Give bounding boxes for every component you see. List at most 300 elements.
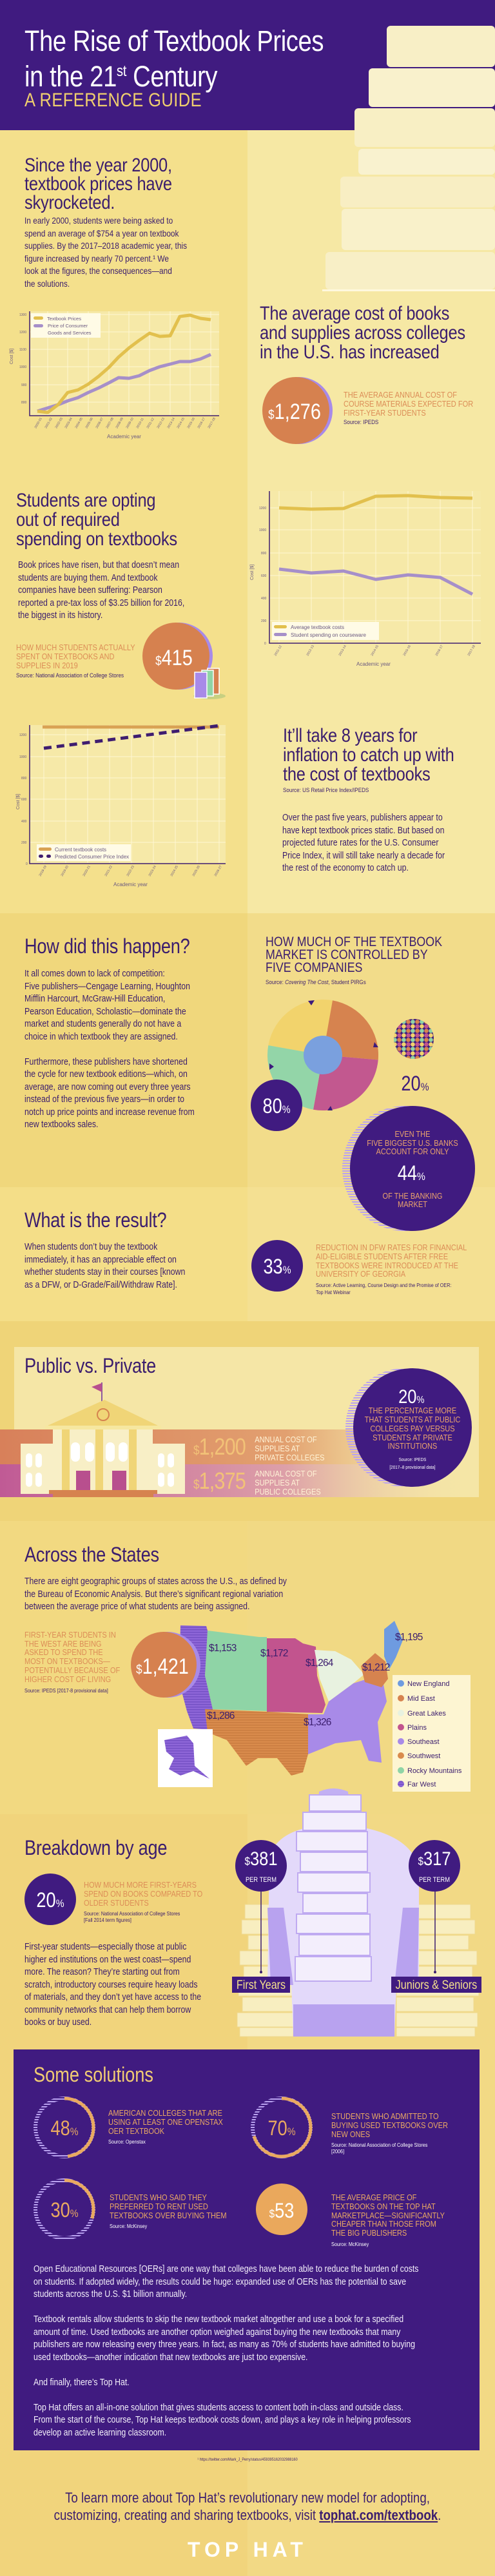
- callout: 70% used: [2006]: [331, 2148, 344, 2155]
- text: first-year students: higher ed institutions on the west coast—spend: [24, 1954, 191, 1964]
- callout: $415 label: SPENT ON TEXTBOOKS AND: [16, 652, 114, 661]
- text: book prices: the biggest in its history.: [18, 610, 102, 621]
- chart: textbook prices vs consumer goods: 2011-12: [146, 417, 155, 429]
- callout: $53 top hat: THE BIG PUBLISHERS: [331, 2228, 407, 2238]
- chart: textbook costs vs student spending: Student spending on courseware: [291, 632, 367, 638]
- stat circle: 20% public vs private: THAT STUDENTS AT PUBLIC: [365, 1415, 461, 1424]
- callout: 30% rent: TEXTBOOKS OVER BUYING THEM: [110, 2211, 227, 2220]
- text: first-year students: scratch, introductory courses require heavy loads: [24, 1980, 198, 1990]
- text: first-year students: books or buy used.: [24, 2017, 92, 2028]
- stat circle: banks 44%: FIVE BIGGEST U.S. BANKS: [367, 1138, 458, 1148]
- callout: $53 top hat: THE AVERAGE PRICE OF: [331, 2193, 416, 2202]
- chart: textbook prices vs consumer goods: 2005-06: [85, 417, 94, 429]
- stat: $1,200 private: SUPPLIES AT: [255, 1444, 300, 1453]
- heading: market controlled: FIVE COMPANIES: [266, 960, 362, 975]
- chart: textbook costs vs student spending: 200: [261, 619, 267, 623]
- donut: 30%: [35, 2180, 93, 2238]
- chart: textbook costs vs predicted CPI: 2021-22: [104, 865, 113, 877]
- text: intro: supplies. By the 2017–2018 academic year, this: [24, 240, 187, 251]
- legend: map regions: Plains: [407, 1724, 427, 1732]
- callout: 20% first-years: [Fall 2014 term figures]: [84, 1917, 131, 1923]
- chart: textbook costs vs predicted CPI: 2025-26: [192, 865, 201, 877]
- text: DFW: as a DFW, or D-Grade/Fail/Withdraw Rate].: [24, 1280, 177, 1290]
- callout: 30% rent: [110, 2193, 227, 2229]
- stat: first years $381: $381: [244, 1848, 278, 1869]
- text: publishers static: the rest of the economy to catch up.: [282, 863, 409, 873]
- text: lack of competition: Mifflin Harcourt, McGraw-Hill Education,: [24, 994, 165, 1004]
- stat: $1,375 public: SUPPLIES AT: [255, 1478, 300, 1487]
- chart: textbook prices vs consumer goods: 2017-18: [208, 417, 217, 429]
- chart: textbook costs vs predicted CPI: Cost [$]: [16, 794, 21, 809]
- callout: 48% OER: OER TEXTBOOK: [108, 2126, 164, 2136]
- title: The Rise of Textbook Prices: [24, 24, 324, 57]
- chart: textbook prices vs consumer goods: Price of Consumer: [48, 323, 88, 329]
- text: solutions paragraphs: develop an active learning classroom.: [34, 2427, 166, 2437]
- chart: textbook costs vs student spending: 2015-16: [403, 644, 412, 657]
- callout: 70% used: Source: National Association of College Stores: [331, 2142, 427, 2148]
- source: covering the cost: Source: Covering The Cost, Student PIRGs: [266, 979, 366, 986]
- callout: 48% OER: Source: Openstax: [108, 2138, 146, 2145]
- callout: $415 label: Source: National Association of College Stores: [16, 672, 124, 679]
- heading: public vs private: Public vs. Private: [24, 1354, 156, 1377]
- text: book prices: reported a pre-tax loss of $3.25 billion for 2016,: [18, 598, 184, 608]
- chart: textbook costs vs student spending: 1000: [259, 528, 266, 532]
- text: book prices: Book prices have risen, but that doesn’t mean: [18, 560, 179, 570]
- chart: textbook prices vs consumer goods: 2007-08: [106, 417, 115, 429]
- callout: $1,276 label: [344, 390, 473, 426]
- stat: $1,200 private: [193, 1433, 324, 1462]
- text: lack of competition: the cycle for new textbook editions—which, on: [24, 1069, 188, 1080]
- chart: textbook costs vs predicted CPI: 2019-20: [61, 865, 70, 877]
- text: solutions paragraphs: Textbook rentals allow students to skip the new textbook market altogether and use a book for a specified: [34, 2314, 403, 2325]
- chart: textbook costs vs predicted CPI: 400: [21, 820, 27, 824]
- title: in the 21st Century: [24, 60, 217, 93]
- chart: textbook costs vs predicted CPI: 1000: [19, 755, 26, 759]
- callout: 20% first-years: HOW MUCH MORE FIRST-YEARS: [84, 1880, 197, 1890]
- text: lack of competition: average, are now coming out every three years: [24, 1081, 191, 1092]
- chart: textbook prices vs consumer goods: 2012-13: [157, 417, 166, 429]
- chart: textbook costs vs predicted CPI: 2024-25: [170, 865, 179, 877]
- legend: map regions: Far West: [407, 1781, 436, 1788]
- heading: breakdown by age: Breakdown by age: [24, 1836, 167, 1859]
- stat circle: 20% breakdown by age: 20%: [36, 1889, 64, 1912]
- map: US regions: $1,286: [207, 1710, 235, 1721]
- heading: market controlled: HOW MUCH OF THE TEXTBOOK: [266, 935, 442, 949]
- chart: textbook costs vs predicted CPI: 2023-24: [148, 865, 157, 877]
- map: US regions: $1,153: [209, 1643, 237, 1654]
- callout: 70% used: BUYING USED TEXTBOOKS OVER: [331, 2120, 448, 2130]
- call to action: To learn more about Top Hat’s revolutionary new model for adopting,: [65, 2490, 430, 2506]
- donut: 30%: 30%: [50, 2199, 79, 2222]
- chart: textbook costs vs student spending: 600: [261, 574, 267, 578]
- stat circle: banks 44%: ACCOUNT FOR ONLY: [376, 1147, 449, 1156]
- callout: 33% label: REDUCTION IN DFW RATES FOR FINANCIAL: [316, 1243, 467, 1252]
- stat circle: 20% breakdown by age: [24, 1874, 76, 1925]
- chart: textbook prices vs consumer goods: [10, 311, 219, 440]
- chart: textbook costs vs student spending: 2014-15: [371, 644, 380, 657]
- cost bars: [0, 1429, 477, 1497]
- legend: map regions: Mid East: [407, 1695, 435, 1703]
- stat circle: $53: $53: [269, 2200, 294, 2223]
- chart: textbook costs vs predicted CPI: Academic year: [113, 882, 148, 887]
- text: publishers static: [282, 813, 445, 873]
- callout: 70% used: STUDENTS WHO ADMITTED TO: [331, 2111, 439, 2121]
- callout: 20% first-years: SPEND ON BOOKS COMPARED TO: [84, 1889, 202, 1899]
- stat circle: 33%: 33%: [263, 1255, 291, 1279]
- stat: $1,375 public: $1,375: [193, 1467, 246, 1494]
- text: lack of competition: It all comes down to lack of competition:: [24, 969, 165, 979]
- subtitle: A REFERENCE GUIDE: [24, 90, 202, 111]
- legend: map regions: Southwest: [407, 1752, 440, 1760]
- callout: $53 top hat: [331, 2193, 445, 2247]
- callout: west spends most: HIGHER COST OF LIVING: [24, 1674, 111, 1684]
- stat circle: 20% public vs private: COLLEGES PAY VERSUS: [370, 1424, 455, 1433]
- chart: textbook prices vs consumer goods: Academic year: [107, 434, 141, 440]
- stat: $1,200 private: ANNUAL COST OF: [255, 1435, 317, 1444]
- stat circle: $1,276: $1,276: [268, 399, 321, 424]
- chart: textbook prices vs consumer goods: 1200: [19, 331, 26, 334]
- legend: map regions: [393, 1675, 471, 1792]
- heading: across the states: Across the States: [24, 1543, 159, 1566]
- heading: average cost: The average cost of books: [260, 303, 449, 324]
- text: lack of competition: instead of the previous five years—in order to: [24, 1094, 184, 1105]
- callout: $415 label: SUPPLIES IN 2019: [16, 661, 78, 670]
- heading: market controlled: [266, 935, 442, 975]
- donut: 70%: [253, 2098, 311, 2156]
- stat: $1,200 private: PRIVATE COLLEGES: [255, 1453, 324, 1462]
- callout: west spends most: [24, 1630, 120, 1694]
- callout: 33% label: TEXTBOOKS WERE INTRODUCED AT THE: [316, 1261, 458, 1270]
- map: US regions: [158, 1621, 423, 1787]
- chart: textbook prices vs consumer goods: 1000: [19, 365, 26, 369]
- text: solutions paragraphs: students across the U.S. $1 billion annually.: [34, 2289, 187, 2300]
- illustration: student carrying books: [237, 1788, 479, 2037]
- stat: first years $381: [232, 1840, 290, 1993]
- chart: textbook costs vs student spending: Average textbook costs: [291, 625, 344, 630]
- text: publishers static: Price Index, it will still take nearly a decade for: [282, 851, 445, 861]
- icon: dotted circle 20%: [394, 1019, 434, 1096]
- callout: $53 top hat: TEXTBOOKS ON THE TOP HAT: [331, 2202, 436, 2211]
- stat circle: $53: [256, 2184, 307, 2235]
- text: book prices: companies have been suffering: Pearson: [18, 585, 162, 596]
- text: geographic groups: [24, 1576, 287, 1612]
- text: lack of competition: Furthermore, these publishers have shortened: [24, 1057, 188, 1067]
- chart: textbook prices vs consumer goods: 2014-15: [177, 417, 186, 429]
- chart: textbook costs vs student spending: 2017-18: [467, 644, 476, 657]
- chart: textbook prices vs consumer goods: 2010-11: [136, 417, 145, 429]
- chart: textbook prices vs consumer goods: Textbook Prices: [47, 316, 81, 322]
- heading: students opting out: [16, 490, 177, 550]
- callout: 33% label: Source: Active Learning, Course Design and the Promise of OER:: [316, 1282, 451, 1288]
- chart: textbook prices vs consumer goods: 2009-10: [126, 417, 135, 429]
- heading: since 2000: Since the year 2000,: [24, 155, 172, 176]
- text: solutions paragraphs: And finally, there’s Top Hat.: [34, 2377, 130, 2387]
- callout: west spends most: POTENTIALLY BECAUSE OF: [24, 1665, 120, 1675]
- chart: textbook prices vs consumer goods: 2016-17: [197, 417, 206, 429]
- stat: $1,375 public: [193, 1467, 321, 1496]
- heading: since 2000: [24, 155, 172, 213]
- text: intro: spend an average of $754 a year on textbook: [24, 228, 179, 238]
- chart: textbook costs vs student spending: 0: [264, 642, 266, 646]
- text: intro: In early 2000, students were being asked to: [24, 215, 173, 226]
- map: US regions: $1,172: [260, 1648, 288, 1659]
- heading: how did this happen: How did this happen?: [24, 935, 190, 958]
- call to action: [54, 2490, 441, 2523]
- stat circle: banks 44%: OF THE BANKING: [383, 1191, 442, 1201]
- legend: map regions: Southeast: [407, 1738, 440, 1746]
- heading: since 2000: skyrocketed.: [24, 192, 115, 213]
- heading: 8 years: It’ll take 8 years for: [283, 725, 417, 746]
- stat circle: 80%: 80%: [262, 1095, 291, 1118]
- header band: [0, 0, 495, 130]
- callout: $1,276 label: THE AVERAGE ANNUAL COST OF: [344, 390, 457, 400]
- text: lack of competition: new textbooks sales.: [24, 1119, 98, 1130]
- chart: textbook costs vs predicted CPI: 2020-21: [82, 865, 92, 877]
- text: first-year students: of materials, and they don’t yet have access to the: [24, 1992, 201, 2002]
- callout: 48% OER: AMERICAN COLLEGES THAT ARE: [108, 2108, 222, 2118]
- chart: textbook prices vs consumer goods: 2015-16: [187, 417, 196, 429]
- stat: juniors & seniors $317: $317: [418, 1848, 451, 1869]
- callout: $53 top hat: CHEAPER THAN THOSE FROM: [331, 2219, 436, 2229]
- text: solutions paragraphs: publishers are now releasing every three years. In fact, as many as 70% of students have admitted to buying: [34, 2339, 415, 2350]
- stat: juniors & seniors $317: [391, 1840, 481, 1993]
- chart: textbook costs vs predicted CPI: 1200: [19, 733, 26, 737]
- illustration: stack of books top right: [322, 26, 495, 291]
- chart: textbook prices vs consumer goods: 800: [21, 401, 27, 405]
- chart: textbook costs vs predicted CPI: Predicted Consumer Price Index: [55, 854, 129, 860]
- callout: $415 label: HOW MUCH STUDENTS ACTUALLY: [16, 643, 135, 652]
- text: intro: figure increased by nearly 70 percent.¹ We: [24, 253, 169, 263]
- callout: $1,276 label: Source: IPEDS: [344, 419, 378, 426]
- text: DFW: immediately, it has an appreciable effect on: [24, 1254, 177, 1264]
- callout: 33% label: [316, 1243, 467, 1295]
- callout: 30% rent: Source: McKinsey: [110, 2223, 147, 2229]
- map: US regions: $1,212: [362, 1662, 390, 1673]
- legend: map regions: Great Lakes: [407, 1710, 446, 1718]
- chart: textbook costs vs predicted CPI: 2022-23: [126, 865, 135, 877]
- heading: students opting out: Students are opting: [16, 490, 155, 511]
- callout: $415 label: [16, 643, 135, 679]
- chart: textbook costs vs student spending: Academic year: [356, 661, 391, 667]
- chart: textbook prices vs consumer goods: 2008-09: [115, 417, 124, 429]
- stat circle: $415 with books icon: $415: [155, 645, 193, 670]
- text: publishers static: have kept textbook prices static. But based on: [282, 825, 444, 835]
- text: geographic groups: There are eight geographic groups of states across the U.S., as defined by: [24, 1576, 287, 1587]
- callout: $1,276 label: COURSE MATERIALS EXPECTED FOR: [344, 399, 473, 409]
- stat circle: $1,421: $1,421: [136, 1654, 189, 1679]
- text: DFW: whether students stay in their courses [known: [24, 1267, 185, 1277]
- chart: textbook costs vs student spending: 2013-14: [338, 644, 347, 657]
- chart: textbook prices vs consumer goods: 2001-02: [44, 417, 53, 429]
- text: lack of competition: Pearson Education, Scholastic—dominate the: [24, 1007, 186, 1017]
- panel: public vs private background: [14, 1347, 479, 1497]
- map: US regions: $1,195: [395, 1632, 423, 1643]
- callout: 33% label: AID-ELIGIBLE STUDENTS AFTER FREE: [316, 1252, 448, 1261]
- call to action: customizing, creating and sharing textbooks, visit tophat.com/textbook.: [54, 2507, 441, 2523]
- text: first-year students: more. The reason? They’re starting out from: [24, 1967, 180, 1977]
- panel: some solutions: [14, 2049, 480, 2450]
- callout: 70% used: [331, 2111, 448, 2155]
- heading: 8 years: inflation to catch up with: [283, 744, 454, 766]
- text: geographic groups: between the average price of what students are being assigned.: [24, 1602, 249, 1612]
- chart: textbook costs vs predicted CPI: 600: [21, 798, 27, 802]
- text: solutions paragraphs: on students. If adopted widely, the results could be huge: expanded use of OERs has the potential to save: [34, 2276, 406, 2287]
- chart: textbook prices vs consumer goods: 2004-05: [75, 417, 84, 429]
- text: DFW: When students don’t buy the textbook: [24, 1242, 157, 1252]
- text: solutions paragraphs: Open Educational Resources [OERs] are one way that colleges have been able to reduce the burden of costs: [34, 2264, 418, 2274]
- chart: textbook costs vs student spending: 800: [261, 552, 267, 556]
- stat: $1,375 public: ANNUAL COST OF: [255, 1469, 317, 1478]
- chart: textbook costs vs predicted CPI: 0: [26, 862, 28, 866]
- chart: textbook costs vs student spending: 2016-17: [435, 644, 444, 657]
- chart: textbook costs vs predicted CPI: 2026-27: [214, 865, 223, 877]
- callout: 20% first-years: [84, 1880, 202, 1923]
- text: lack of competition: choice in which textbook they are assigned.: [24, 1031, 178, 1041]
- stat circle: $415 with books icon: [142, 623, 226, 699]
- callout: west spends most: Source: IPEDS [2017-8 provisional data]: [24, 1687, 108, 1694]
- chart: textbook costs vs student spending: 400: [261, 597, 267, 601]
- text: lack of competition: Five publishers—Cengage Learning, Houghton: [24, 981, 190, 991]
- heading: some solutions: Some solutions: [34, 2063, 153, 2086]
- callout: 70% used: NEW ONES: [331, 2129, 370, 2139]
- stat circle: 20% public vs private: [345, 1368, 472, 1487]
- stat circle: banks 44%: EVEN THE: [395, 1129, 430, 1139]
- heading: 8 years: [283, 725, 454, 785]
- chart: textbook prices vs consumer goods: 2006-07: [95, 417, 104, 429]
- chart: textbook costs vs student spending: [250, 491, 481, 667]
- heading: average cost: and supplies across colleges: [260, 322, 465, 344]
- text: solutions paragraphs: amount of time. Used textbooks are another option weighed against buying the new textbooks that many: [34, 2327, 400, 2337]
- stat circle: 20% public vs private: STUDENTS AT PRIVATE: [373, 1433, 452, 1442]
- callout: 33% label: Top Hat Webinar: [316, 1289, 351, 1295]
- stat circle: banks 44%: [342, 1106, 475, 1231]
- callout: west spends most: FIRST-YEAR STUDENTS IN: [24, 1630, 116, 1640]
- chart: textbook costs vs predicted CPI: 800: [21, 777, 27, 780]
- stat circle: $1,421: [131, 1632, 200, 1698]
- callout: west spends most: ASKED TO SPEND THE: [24, 1647, 103, 1657]
- heading: market controlled: MARKET IS CONTROLLED BY: [266, 947, 428, 962]
- stat circle: 20% public vs private: [2017–8 provisional data]: [389, 1466, 436, 1470]
- map: US regions: $1,264: [306, 1658, 334, 1669]
- text: intro: the solutions.: [24, 278, 70, 289]
- stat circle: 20% public vs private: THE PERCENTAGE MORE: [369, 1406, 456, 1415]
- stat circle: 20% public vs private: Source: IPEDS: [399, 1458, 427, 1462]
- donut: 48%: 48%: [50, 2117, 79, 2140]
- heading: average cost: in the U.S. has increased: [260, 342, 440, 363]
- text: solutions paragraphs: [34, 2264, 418, 2437]
- source: retail price index: Source: US Retail Price Index/IPEDS: [283, 787, 369, 794]
- text: solutions paragraphs: Top Hat offers an all-in-one solution that gives students access to content both in-class and outside class.: [34, 2403, 403, 2413]
- heading: what is the result: What is the result?: [24, 1208, 166, 1232]
- callout: 48% OER: USING AT LEAST ONE OPENSTAX: [108, 2117, 223, 2127]
- stat: $1,375 public: PUBLIC COLLEGES: [255, 1487, 321, 1496]
- text: solutions paragraphs: used textbooks—another indication that new textbooks are just too expensive.: [34, 2352, 307, 2363]
- callout: 33% label: UNIVERSITY OF GEORGIA: [316, 1269, 405, 1279]
- chart: textbook prices vs consumer goods: 1100: [19, 348, 26, 352]
- pie chart: five companies: [267, 1000, 378, 1110]
- stat circle: 33%: [251, 1240, 303, 1292]
- chart: textbook prices vs consumer goods: 900: [21, 383, 27, 387]
- text: first-year students: community networks that can help them borrow: [24, 2004, 191, 2015]
- callout: $53 top hat: Source: McKinsey: [331, 2241, 369, 2247]
- chart: textbook prices vs consumer goods: Cost [$]: [10, 349, 14, 364]
- heading: students opting out: spending on textbooks: [16, 528, 177, 550]
- stat: $1,200 private: $1,200: [193, 1433, 246, 1460]
- logo: top hat: TOP HAT: [188, 2538, 307, 2561]
- text: intro: look at the figures, the consequences—and: [24, 266, 172, 276]
- text: first-year students: First-year students—especially those at public: [24, 1942, 186, 1952]
- stat circle: $1,276: [262, 377, 333, 444]
- stat circle: banks 44%: MARKET: [398, 1199, 428, 1209]
- text: DFW: [24, 1242, 185, 1290]
- chart: textbook costs vs predicted CPI: [16, 725, 226, 887]
- callout: west spends most: MOST ON TEXTBOOKS—: [24, 1656, 110, 1666]
- callout: west spends most: THE WEST ARE BEING: [24, 1639, 102, 1649]
- chart: textbook prices vs consumer goods: 2003-04: [64, 417, 73, 429]
- donut: 70%: 70%: [267, 2117, 296, 2140]
- map: US regions: $1,326: [304, 1717, 331, 1728]
- chart: textbook costs vs predicted CPI: Current textbook costs: [55, 847, 106, 853]
- chart: textbook prices vs consumer goods: Goods and Services: [48, 330, 92, 336]
- text: book prices: students are buying them. And textbook: [18, 572, 158, 583]
- illustration: college building: [21, 1382, 185, 1497]
- chart: textbook costs vs student spending: Cost [$]: [250, 565, 255, 580]
- stat circle: banks 44%: 44%: [398, 1162, 425, 1185]
- title: [24, 24, 324, 93]
- callout: 20% first-years: Source: National Association of College Stores: [84, 1910, 180, 1917]
- text: geographic groups: the Bureau of Economic Analysis. But there’s significant regional variation: [24, 1589, 283, 1600]
- callout: $1,276 label: FIRST-YEAR STUDENTS: [344, 408, 426, 418]
- legend: map regions: Rocky Mountains: [407, 1767, 462, 1775]
- chart: textbook prices vs consumer goods: 2002-03: [55, 417, 64, 429]
- chart: textbook prices vs consumer goods: 1300: [19, 313, 26, 317]
- chart: textbook costs vs student spending: 2012-13: [306, 644, 315, 657]
- callout: 30% rent: PREFERRED TO RENT USED: [110, 2202, 208, 2211]
- stat circle: 20% public vs private: 20%: [398, 1386, 425, 1407]
- text: lack of competition: notch up price points and increase revenue from: [24, 1107, 195, 1118]
- text: publishers static: Over the past five years, publishers appear to: [282, 813, 443, 823]
- chart: textbook costs vs student spending: 2011-12: [274, 644, 283, 657]
- callout: 30% rent: STUDENTS WHO SAID THEY: [110, 2193, 207, 2202]
- text: lack of competition: market and students generally do not have a: [24, 1019, 181, 1029]
- chart: textbook costs vs predicted CPI: 2018-19: [39, 865, 48, 877]
- stat circle: 20% public vs private: INSTITUTIONS: [388, 1441, 437, 1451]
- text: intro: [24, 215, 187, 289]
- chart: textbook costs vs predicted CPI: 200: [21, 841, 27, 845]
- text: solutions paragraphs: From the start of the course, Top Hat keeps textbook costs down, and plays a key role in helping professors: [34, 2415, 411, 2425]
- stat: first years $381: First Years: [237, 1978, 286, 1991]
- heading: students opting out: out of required: [16, 509, 120, 530]
- stat: juniors & seniors $317: Juniors & Seniors: [396, 1978, 477, 1991]
- chart: textbook costs vs student spending: 1200: [259, 507, 266, 510]
- stat: first years $381: PER TERM: [246, 1876, 277, 1884]
- callout: $53 top hat: MARKETPLACE—SIGNIFICANTLY: [331, 2211, 445, 2220]
- chart: textbook prices vs consumer goods: 2000-01: [34, 417, 43, 429]
- callout: 20% first-years: OLDER STUDENTS: [84, 1898, 149, 1908]
- heading: average cost: [260, 303, 465, 363]
- callout: 48% OER: [108, 2108, 223, 2145]
- text: publishers static: projected future rates for the U.S. Consumer: [282, 838, 439, 848]
- icon: dotted circle 20%: 20%: [401, 1072, 429, 1096]
- text: lack of competition: [24, 969, 195, 1130]
- text: first-year students: [24, 1942, 201, 2028]
- legend: map regions: New England: [407, 1680, 449, 1688]
- text: book prices: [18, 560, 184, 621]
- footnote: ¹ https://twitter.com/Mark_J_Perry/status/459395162032988160: [197, 2457, 298, 2462]
- heading: 8 years: the cost of textbooks: [283, 764, 431, 785]
- stat: juniors & seniors $317: PER TERM: [419, 1876, 450, 1884]
- heading: since 2000: textbook prices have: [24, 173, 172, 195]
